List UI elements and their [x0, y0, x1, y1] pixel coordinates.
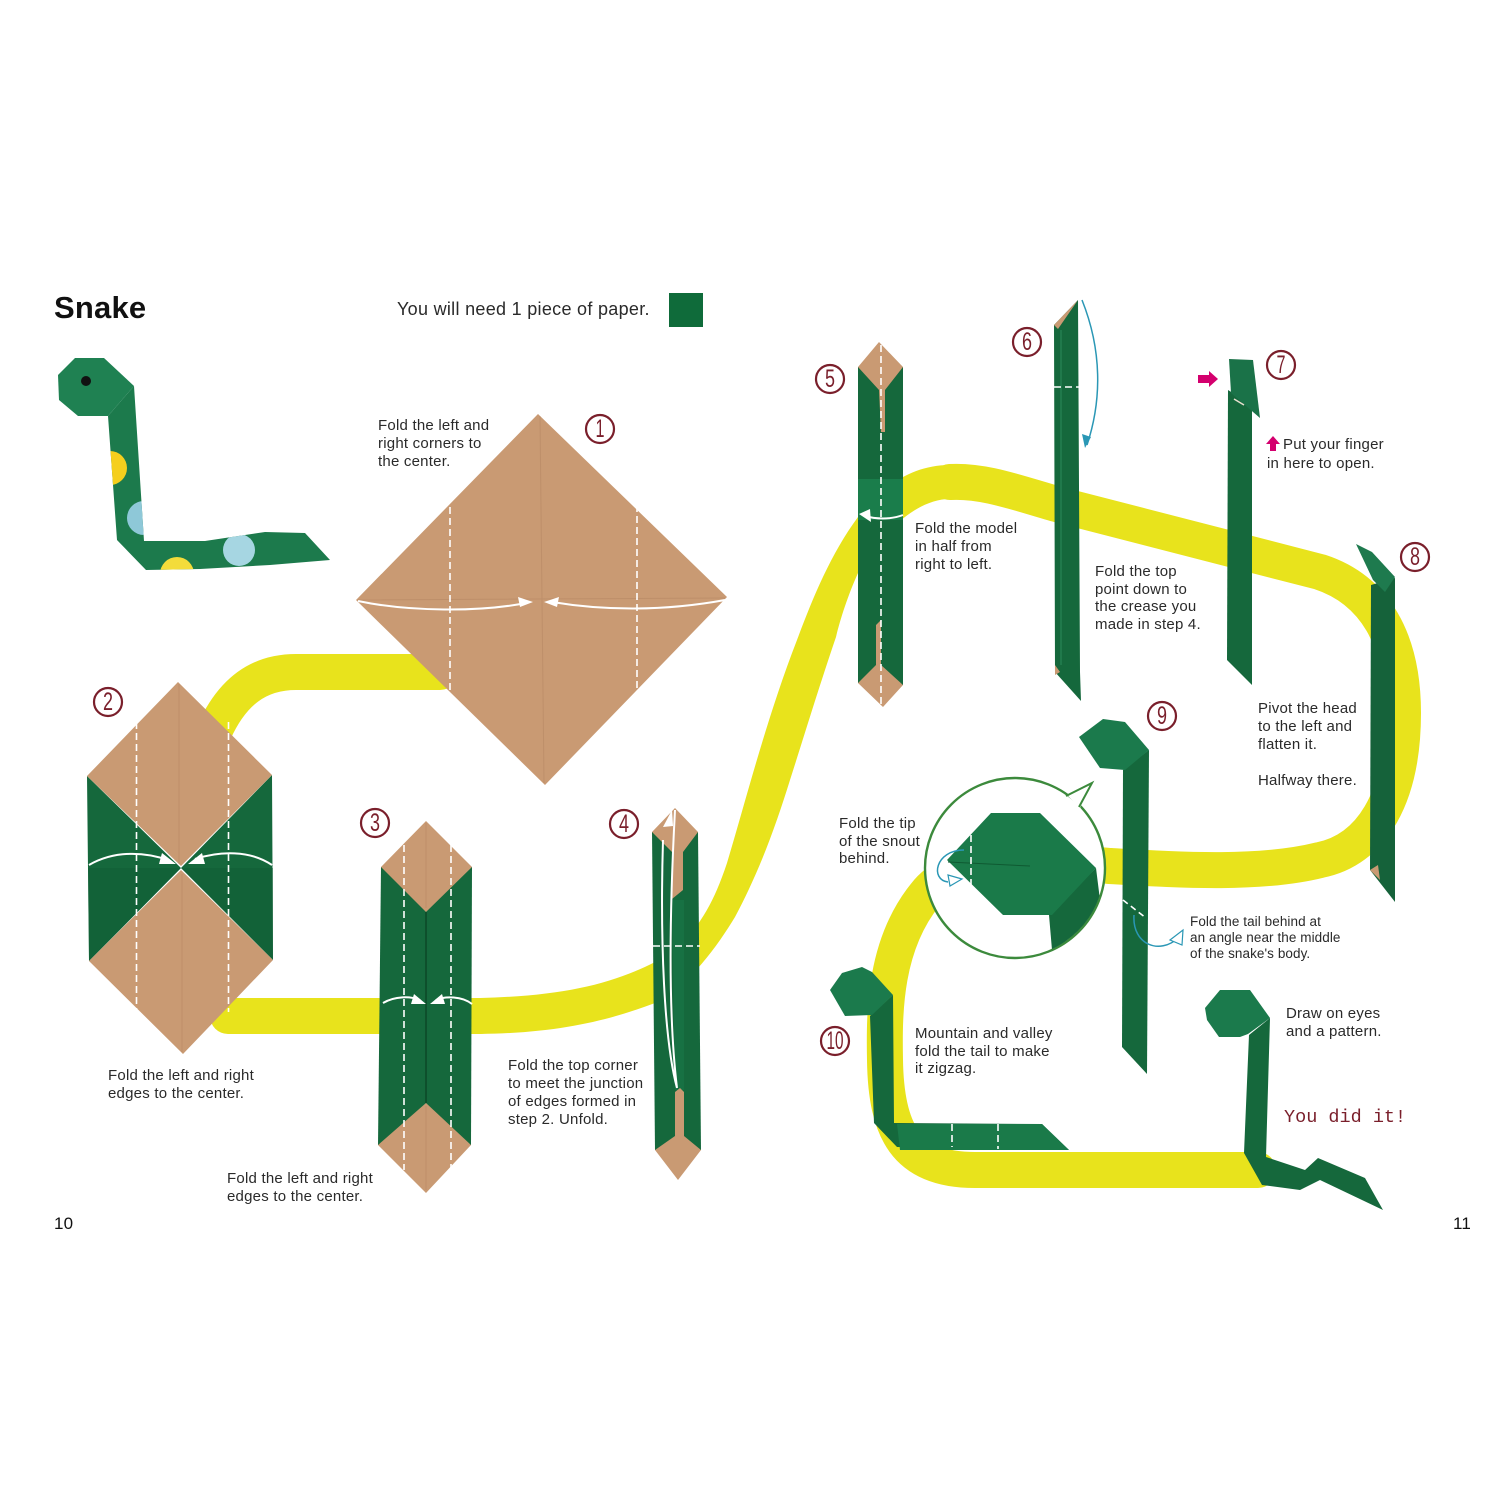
step 1: kraft diamond: [356, 414, 727, 785]
step 10: L-shaped snake: 10: [826, 1027, 844, 1055]
step 2: folded hexagon: 2: [103, 688, 113, 716]
step 5 instruction: Fold the model: [915, 520, 1017, 537]
step 10 instruction: fold the tail to make: [915, 1043, 1050, 1060]
title: Snake: [54, 290, 146, 325]
step 3: folded strip: 3: [370, 809, 380, 837]
step 6: single narrow strip: 6: [1022, 328, 1032, 356]
yellow path ribbon linking steps: [214, 465, 1403, 1170]
step 4 instruction: step 2. Unfold.: [508, 1111, 608, 1128]
pink up arrow note: in here to open.: [1267, 455, 1375, 472]
step 3: folded strip: [227, 809, 472, 1205]
step 8 instruction: Halfway there.: [1258, 772, 1357, 789]
final snake with zigzag tail: [1205, 990, 1406, 1210]
step 9 instruction: of the snake's body.: [1190, 946, 1310, 961]
page number right: 11: [1453, 1214, 1471, 1233]
step 3 instruction: edges to the center.: [227, 1188, 363, 1205]
step 6 instruction: point down to: [1095, 581, 1187, 598]
step 6 instruction: made in step 4.: [1095, 616, 1201, 633]
step 8 instruction: Pivot the head: [1258, 700, 1357, 717]
step 6: single narrow strip: [1013, 300, 1201, 701]
pink up arrow note: [1266, 436, 1384, 472]
page number left: 10: [54, 1214, 73, 1233]
you did it message: You did it!: [1284, 1107, 1406, 1128]
step 3 instruction: Fold the left and right: [227, 1170, 374, 1187]
step 7: strip with folded head: [1198, 351, 1384, 685]
step 4 instruction: of edges formed in: [508, 1093, 636, 1110]
step 6 instruction: the crease you: [1095, 598, 1196, 615]
snout instruction: behind.: [839, 850, 890, 867]
step 9: strip with head: [1079, 702, 1341, 1074]
step 2 instruction: Fold the left and right: [108, 1067, 255, 1084]
step 9 instruction: an angle near the middle: [1190, 930, 1341, 945]
step 5: strip with centre fold: [816, 342, 1017, 707]
step 8: pivoted head strip: [1258, 543, 1429, 902]
paper requirement note: You will need 1 piece of paper.: [397, 299, 650, 319]
step 2: folded hexagon: [87, 682, 273, 1102]
snout instruction: Fold the tip: [839, 815, 916, 832]
step 5 instruction: in half from: [915, 538, 992, 555]
finished snake illustration: [58, 358, 330, 591]
step 4: narrow strip: 4: [619, 810, 629, 838]
step 4: narrow strip: [508, 808, 701, 1180]
step 1: kraft diamond: 1: [596, 415, 604, 443]
final step instruction: Draw on eyes: [1286, 1005, 1380, 1022]
step 5 instruction: right to left.: [915, 556, 992, 573]
step 9 instruction: Fold the tail behind at: [1190, 914, 1321, 929]
paper requirement note: [397, 293, 703, 327]
step 2 instruction: edges to the center.: [108, 1085, 244, 1102]
step 9: strip with head: 9: [1157, 702, 1167, 730]
pink arrow pointer: [1198, 371, 1218, 387]
step 8: pivoted head strip: 8: [1410, 543, 1420, 571]
step 1 instruction: Fold the left and: [378, 417, 489, 434]
step 6 instruction: Fold the top: [1095, 563, 1177, 580]
final step instruction: and a pattern.: [1286, 1023, 1382, 1040]
step 10: L-shaped snake: [821, 967, 1069, 1150]
step 5: strip with centre fold: 5: [825, 365, 835, 393]
step 8 instruction: flatten it.: [1258, 736, 1317, 753]
step 8 instruction: to the left and: [1258, 718, 1352, 735]
step 10 instruction: Mountain and valley: [915, 1025, 1053, 1042]
step 4 instruction: to meet the junction: [508, 1075, 643, 1092]
step 4 instruction: Fold the top corner: [508, 1057, 638, 1074]
step 1 instruction: right corners to: [378, 435, 482, 452]
magnified callout circle of the snout: [839, 778, 1105, 958]
step 10 instruction: it zigzag.: [915, 1060, 976, 1077]
step 1 instruction: the center.: [378, 453, 450, 470]
snout instruction: of the snout: [839, 833, 921, 850]
step 7: strip with folded head: 7: [1276, 351, 1286, 379]
pink up arrow note: Put your finger: [1283, 436, 1384, 453]
